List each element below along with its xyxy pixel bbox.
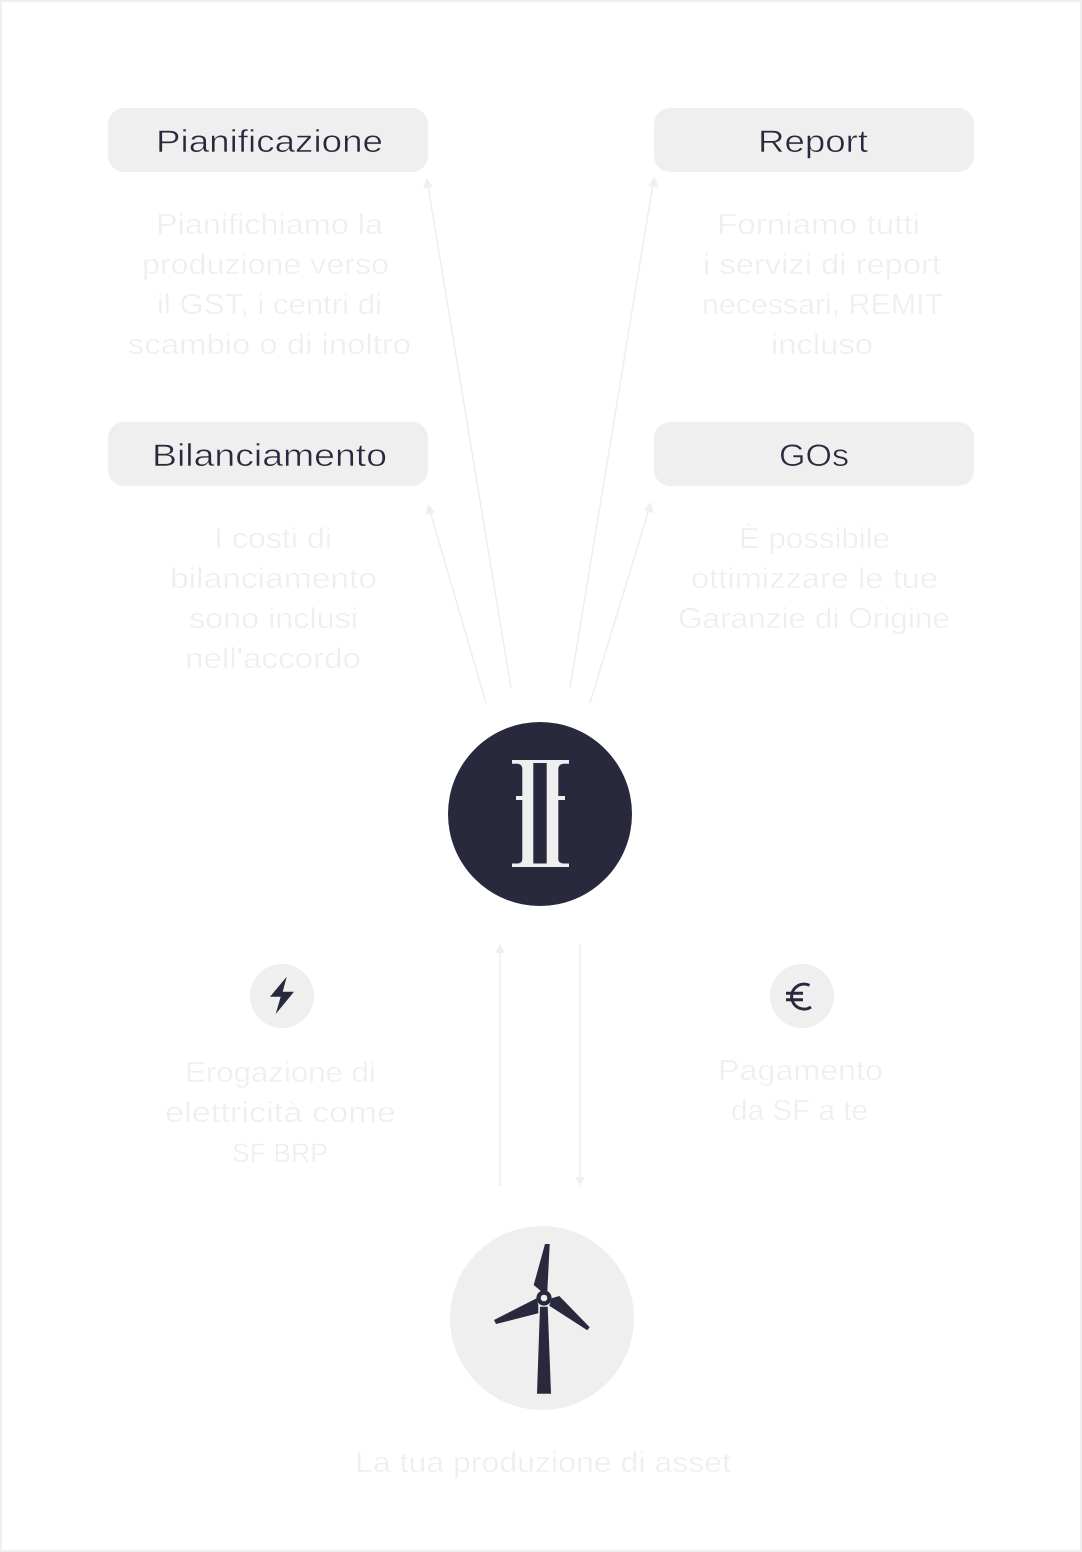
text block: Pianificazione description: produzione verso bbox=[142, 249, 389, 281]
text block: payment: da SF a te bbox=[731, 1095, 868, 1127]
text block: electricity delivery: Erogazione di bbox=[185, 1057, 376, 1089]
text block: GOs description: È possibile bbox=[739, 523, 890, 555]
arrow: to Report bbox=[570, 176, 658, 688]
text block: Bilanciamento description: sono inclusi bbox=[189, 603, 358, 635]
heading: GOs bbox=[654, 422, 974, 486]
icon: euro bbox=[770, 964, 834, 1028]
heading: Report bbox=[654, 108, 974, 172]
text block: electricity delivery: SF BRP bbox=[232, 1138, 328, 1168]
text block: Pianificazione description: Pianifichiamo la bbox=[156, 209, 383, 241]
text block: Pianificazione description: il GST, i centri di bbox=[157, 289, 382, 321]
heading: GOs: GOs bbox=[779, 437, 849, 473]
text block: Report description: i servizi di report bbox=[703, 249, 941, 281]
arrow: to GOs bbox=[590, 502, 654, 703]
text block: Report description bbox=[702, 209, 943, 361]
text block: Report description: Forniamo tutti bbox=[717, 209, 920, 241]
text block: Bilanciamento description: bilanciamento bbox=[170, 563, 377, 595]
arrow: to Bilanciamento bbox=[426, 504, 486, 703]
text block: Pianificazione description bbox=[128, 209, 411, 361]
heading: Bilanciamento: Bilanciamento bbox=[152, 437, 387, 473]
text block: electricity delivery bbox=[165, 1057, 396, 1168]
text block: payment: Pagamento bbox=[718, 1055, 883, 1087]
text block: GOs description: ottimizzare le tue bbox=[691, 563, 938, 595]
text block: GOs description bbox=[678, 523, 950, 635]
heading: Pianificazione: Pianificazione bbox=[156, 123, 383, 159]
heading: Bilanciamento bbox=[108, 422, 428, 486]
text block: Bilanciamento description bbox=[170, 523, 377, 675]
text block: asset caption: La tua produzione di asset bbox=[355, 1447, 731, 1479]
text block: Report description: incluso bbox=[771, 329, 873, 361]
arrow: payment down bbox=[575, 944, 585, 1186]
arrow: to Pianificazione bbox=[423, 178, 511, 688]
icon: lightning bolt bbox=[250, 964, 314, 1028]
text block: payment bbox=[718, 1055, 883, 1127]
heading: Report: Report bbox=[758, 123, 868, 159]
icon: central logo bbox=[448, 722, 632, 906]
text block: Report description: necessari, REMIT bbox=[702, 289, 943, 321]
text block: Bilanciamento description: nell'accordo bbox=[185, 643, 361, 675]
text block: electricity delivery: elettricità come bbox=[165, 1097, 396, 1129]
text block: Pianificazione description: scambio o di inoltro bbox=[128, 329, 411, 361]
text block: GOs description: Garanzie di Origine bbox=[678, 603, 950, 635]
arrow: electricity up bbox=[495, 944, 505, 1186]
heading: Pianificazione bbox=[108, 108, 428, 172]
icon: wind turbine bbox=[450, 1226, 634, 1410]
text block: Bilanciamento description: I costi di bbox=[214, 523, 332, 555]
